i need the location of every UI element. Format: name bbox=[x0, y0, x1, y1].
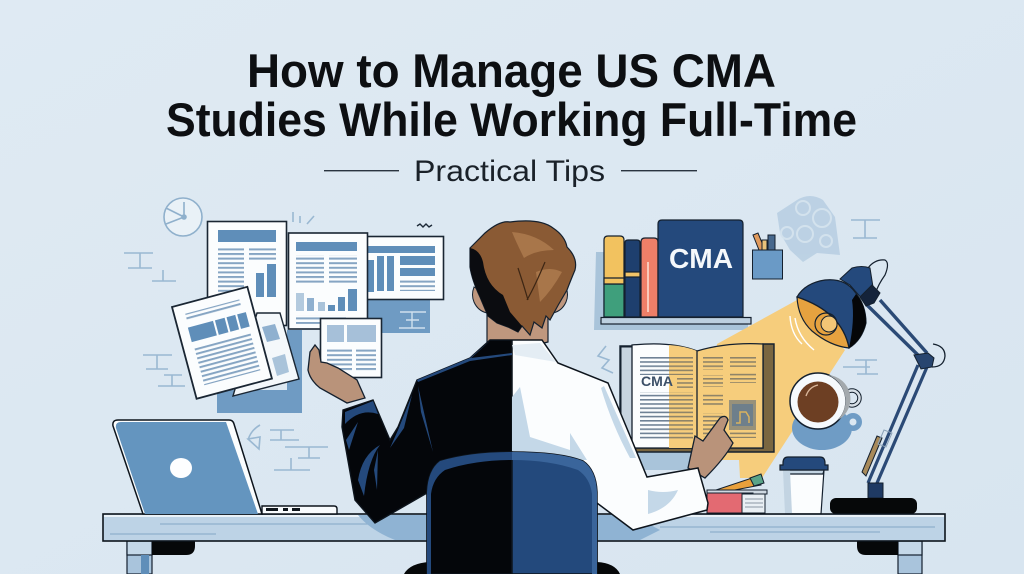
jacket collar bbox=[417, 341, 512, 382]
left hand bbox=[308, 345, 365, 403]
decorative wall glyphs, left bbox=[124, 212, 432, 470]
red books and pencil bbox=[707, 474, 767, 513]
desk shadow from person bbox=[358, 515, 660, 540]
decorative wall glyphs, right bbox=[598, 220, 880, 374]
bookshelf shadow bbox=[594, 252, 748, 330]
title: Studies While Working Full-Time bbox=[166, 93, 857, 146]
person seen from behind bbox=[308, 221, 733, 574]
jacket half: dark bbox=[342, 340, 512, 574]
shirt collar bbox=[512, 343, 556, 362]
document: landscape page bbox=[366, 236, 444, 300]
document: tilted front page bbox=[172, 287, 272, 399]
neck and ears bbox=[487, 300, 548, 346]
icon: pen cup bbox=[752, 233, 782, 279]
open book: CMA bbox=[641, 373, 673, 389]
title: How to Manage US CMA bbox=[247, 44, 776, 97]
books bbox=[604, 220, 743, 317]
sleeve cuff bbox=[345, 401, 378, 424]
title bbox=[166, 44, 857, 146]
jacket folds bbox=[346, 386, 433, 496]
light beam bbox=[717, 300, 845, 478]
wall glyph on blue block bbox=[399, 312, 426, 328]
big book title: CMA bbox=[669, 243, 733, 274]
icon: desk lamp bbox=[797, 260, 945, 514]
light glints bbox=[790, 316, 814, 350]
decorative blob bbox=[777, 196, 840, 262]
document: tilted back page bbox=[233, 313, 299, 396]
shelf bbox=[601, 318, 751, 324]
shirt shadows bbox=[512, 387, 587, 460]
hair strands bbox=[518, 262, 545, 300]
chair bbox=[404, 452, 620, 574]
icon: coffee cup from above bbox=[790, 373, 862, 450]
subtitle with rules: Practical Tips bbox=[414, 155, 605, 188]
hair shadow bbox=[470, 248, 522, 332]
hair bbox=[470, 221, 576, 335]
document: held page bbox=[320, 318, 382, 378]
right hand bbox=[688, 416, 733, 478]
laptop bbox=[113, 420, 337, 514]
document: report with bar chart bbox=[288, 233, 368, 329]
book shadow bbox=[633, 452, 693, 470]
hair highlights bbox=[512, 232, 562, 302]
blue backing blocks bbox=[217, 299, 430, 413]
desk bbox=[103, 514, 945, 574]
shirt half: white bbox=[512, 340, 708, 574]
icon: wall clock bbox=[164, 198, 202, 236]
open book bbox=[620, 344, 774, 452]
document: chart page bbox=[208, 222, 286, 326]
takeaway cup bbox=[780, 457, 828, 514]
